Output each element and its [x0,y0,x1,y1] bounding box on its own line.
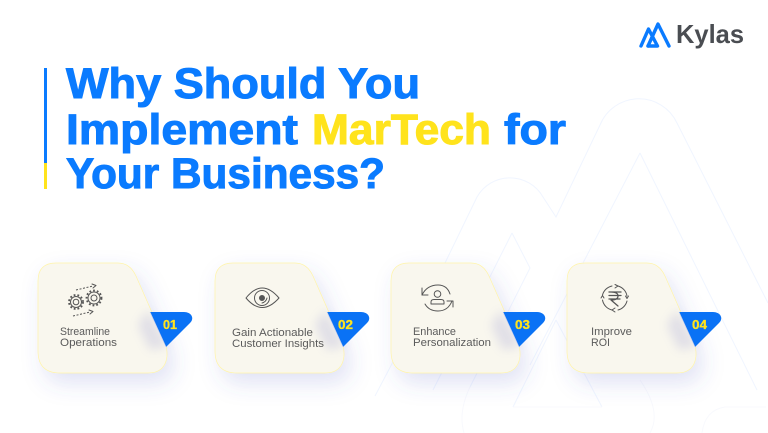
shadow cast on card [138,310,168,350]
number tag 04: 04 [692,318,707,332]
card 01 [38,263,167,373]
label [413,326,491,349]
panel: Improve ROI [567,263,721,373]
label: Improve [591,326,632,338]
wordmark: Kylas [676,19,744,49]
shadow cast on card [667,310,697,350]
title: MarTech [312,106,491,154]
title: Implement [66,106,298,154]
number tag 02: 02 [338,318,353,332]
shadow cast on card [315,310,345,350]
label [591,326,632,349]
panel: Gain Actionable Customer Insights [215,263,369,373]
shadow cast on card [491,310,521,350]
icon: rupee with cycle arrows [601,284,628,312]
label: Enhance [413,326,456,338]
panel: Streamline Operations [38,263,192,373]
card 02 [215,263,344,373]
title: for [504,106,566,154]
logo: Kylas [641,19,744,49]
number tag 01: 01 [163,318,177,332]
number tag 01 [150,312,192,347]
title [66,60,566,198]
label: ROI [591,337,610,349]
number tag 03 [503,312,545,347]
label: Streamline [60,326,110,338]
icon: gears with arrows [69,284,102,316]
label: Personalization [413,337,491,349]
background logo watermark [375,99,768,433]
title: Why Should You [66,60,420,108]
accent bar [44,68,47,189]
number tag 02 [327,312,369,347]
number tag 04 [679,312,721,347]
number tag 03: 03 [515,318,530,332]
title: Your Business? [66,150,385,198]
icon: Kylas mountain mark [641,24,669,46]
icon: person with cycle arrows [422,285,453,311]
label: Operations [60,337,118,349]
label [60,326,118,349]
card 03 [391,263,520,373]
label: Customer Insights [232,338,325,350]
card 04 [567,263,696,373]
panel: Enhance Personalization [391,263,545,373]
icon: eye [246,288,279,308]
label [232,327,325,350]
label: Gain Actionable [232,327,313,339]
